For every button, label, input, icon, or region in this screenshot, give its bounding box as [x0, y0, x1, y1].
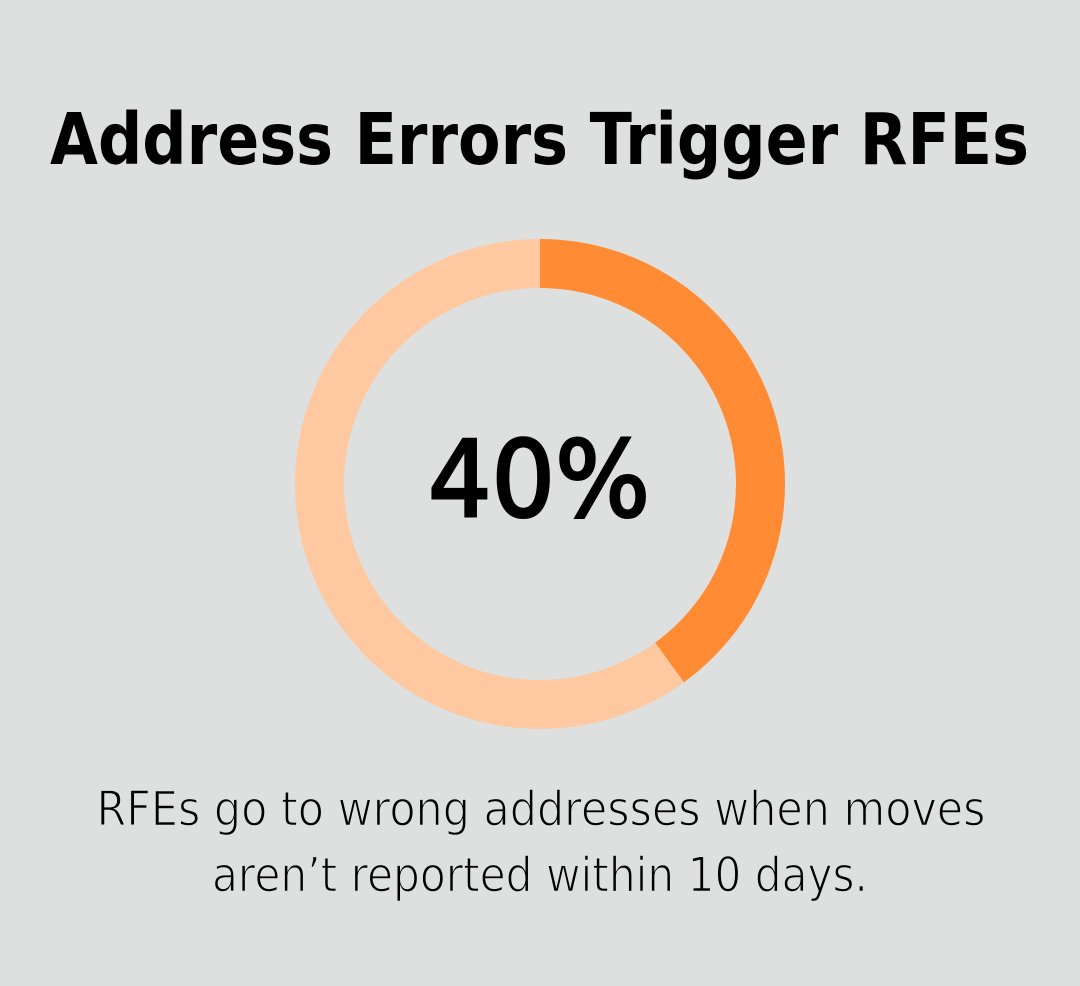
caption [96, 782, 986, 904]
caption line 2: aren’t reported within 10 days. [212, 848, 868, 904]
donut track: remaining 60% [320, 264, 760, 704]
donut chart [320, 264, 761, 704]
caption line 1: RFEs go to wrong addresses when moves [96, 782, 986, 838]
center value: 40%: 40% [428, 418, 650, 541]
donut segment: 40% [540, 264, 761, 662]
